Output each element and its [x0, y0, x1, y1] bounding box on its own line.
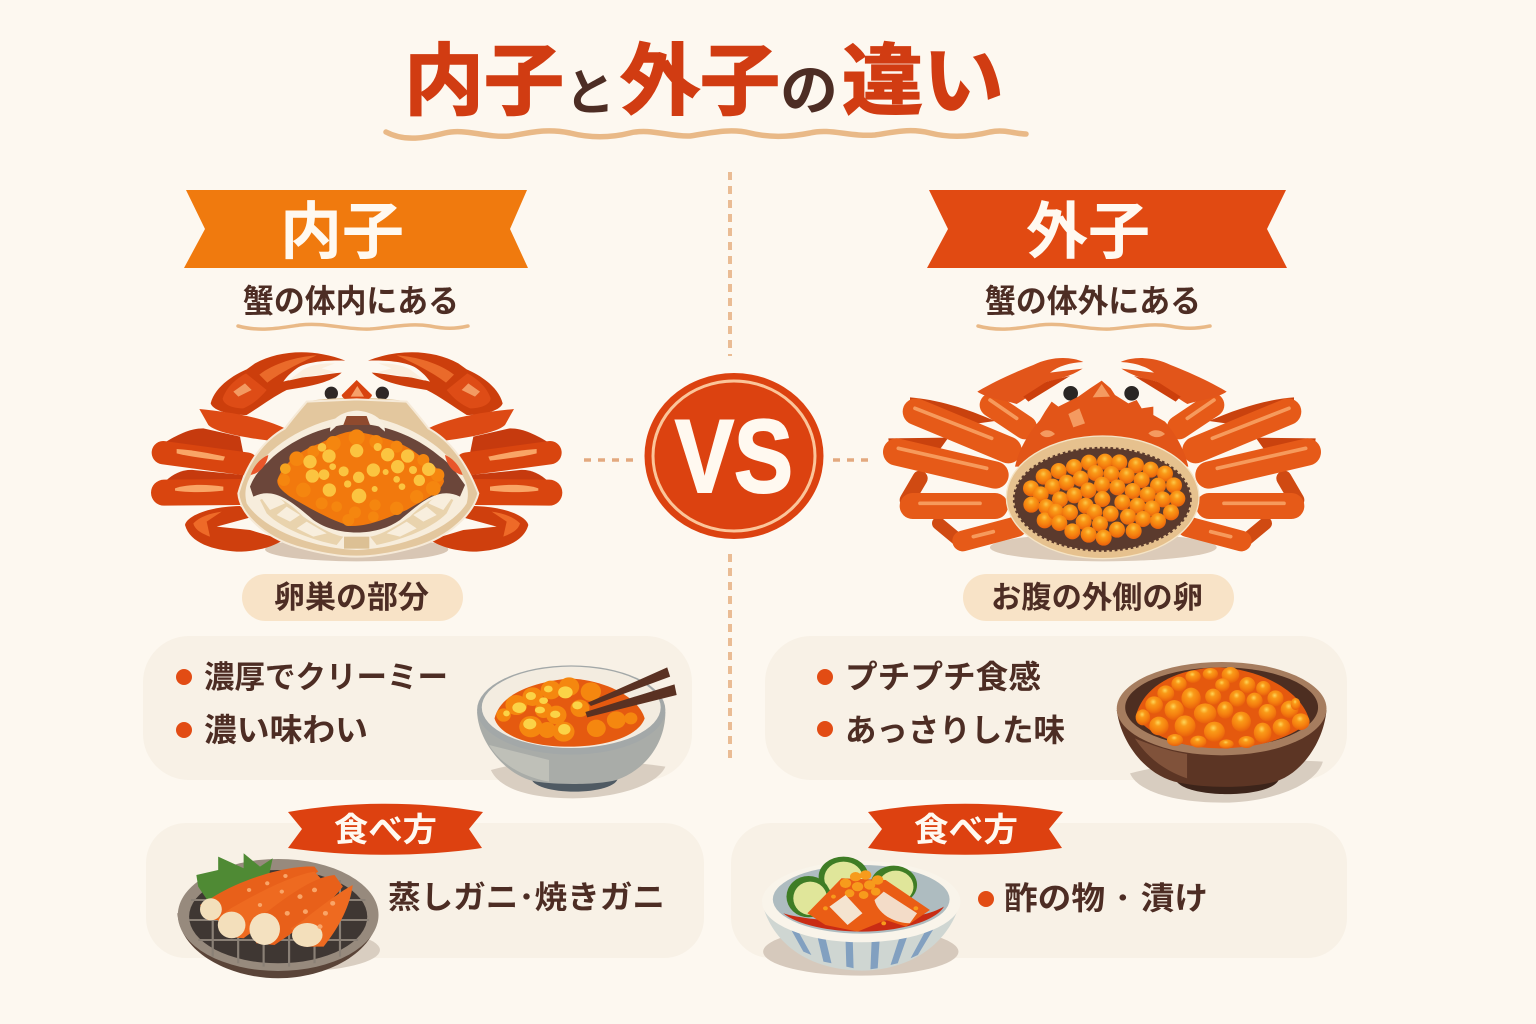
ribbon: 食べ方 right: 食べ方: [914, 811, 1018, 848]
left legs and claw: [163, 352, 345, 552]
tofu: [829, 895, 862, 925]
title: 違い: [842, 37, 1004, 125]
eggs: [1023, 454, 1185, 546]
panel: outer roe characteristics: プチプチ食感: [845, 659, 1041, 695]
banner: 外子: [927, 190, 1287, 268]
illustration: crab with outer eggs: [888, 358, 1316, 561]
speckles: [247, 874, 335, 929]
carapace highlights: [1040, 384, 1165, 437]
bullet: [176, 722, 192, 738]
panel: outer roe characteristics: [765, 636, 1347, 780]
dashed connector right: [833, 458, 870, 462]
panel: inner roe characteristics: 濃い味わい: [204, 712, 368, 748]
roe mass: [277, 429, 444, 526]
center dashed divider bottom: [728, 554, 732, 760]
pill label right: お腹の外側の卵: [991, 581, 1203, 615]
subtitle left: 蟹の体内にある: [243, 283, 459, 319]
VS badge: VS: [675, 399, 793, 515]
panel: inner roe characteristics: [143, 636, 692, 780]
bullet: [176, 669, 192, 685]
left leg highlights: [898, 400, 1017, 537]
VS badge: [644, 373, 824, 539]
ribbon: 食べ方 right: [868, 804, 1063, 855]
pill label left: [242, 574, 463, 621]
belly shell: [1006, 436, 1199, 559]
carapace: [1015, 381, 1188, 467]
scallop: [874, 892, 917, 923]
subtitle left underline: [238, 324, 468, 329]
title: の: [780, 59, 838, 122]
cavity: [250, 423, 465, 532]
icon: brown bowl with eggs: [1117, 662, 1326, 803]
subtitle right: 蟹の体外にある: [985, 283, 1201, 319]
ribbon: 食べ方 left: [288, 804, 483, 855]
panel: how to eat inner roe: [146, 823, 704, 958]
gills: [260, 496, 453, 549]
panel: outer roe characteristics: あっさりした味: [845, 712, 1065, 748]
title underline: [386, 131, 1026, 138]
pill label left: 卵巣の部分: [274, 580, 429, 615]
bullet: [817, 669, 833, 685]
crab leg pieces: [200, 867, 353, 947]
left legs and claw: [888, 358, 1083, 541]
title: 内子: [404, 37, 564, 125]
crab and roe pieces: [807, 878, 930, 932]
panel: how to eat inner roe: 蒸しガニ･焼きガニ: [388, 879, 665, 915]
shell front plate: [330, 411, 385, 432]
icon: vinegared salad bowl: [762, 857, 960, 976]
bowl stripes: [791, 928, 934, 969]
greens: [196, 853, 273, 900]
illustration: open crab with inner roe: [163, 352, 550, 561]
eyes: [1063, 386, 1139, 401]
banner: 内子: [184, 190, 528, 268]
cucumber slices: [786, 857, 917, 917]
title: [404, 37, 1004, 125]
icon: grilled crab legs on grill: [177, 853, 380, 978]
bullet: [978, 891, 994, 907]
chopsticks: [585, 667, 677, 717]
belly cavity: [1014, 448, 1190, 550]
opened shell: [238, 399, 478, 557]
title: 外子: [620, 37, 780, 125]
panel: how to eat outer roe: [731, 823, 1347, 958]
dashed connector left: [584, 458, 636, 462]
shell inner rim: [245, 415, 468, 550]
right legs and claw: [1121, 358, 1316, 541]
mouth: [343, 416, 370, 425]
banner: 内子: 内子: [280, 198, 404, 267]
right legs and claw: [368, 352, 550, 552]
title: と: [565, 65, 615, 121]
center dashed divider top: [728, 172, 732, 356]
side marks: [251, 455, 268, 475]
bullet: [817, 721, 833, 737]
banner: 外子: 外子: [1026, 198, 1150, 267]
subtitle right underline: [978, 324, 1210, 329]
panel: how to eat outer roe: 酢の物 ･ 漬け: [1004, 880, 1208, 916]
icon: grey bowl with roe and chopsticks: [477, 665, 677, 798]
ribbon: 食べ方 left: 食べ方: [334, 811, 437, 848]
eyes and rostrum: [307, 380, 407, 407]
pill label right: [963, 574, 1234, 621]
panel: inner roe characteristics: 濃厚でクリーミー: [204, 660, 448, 695]
